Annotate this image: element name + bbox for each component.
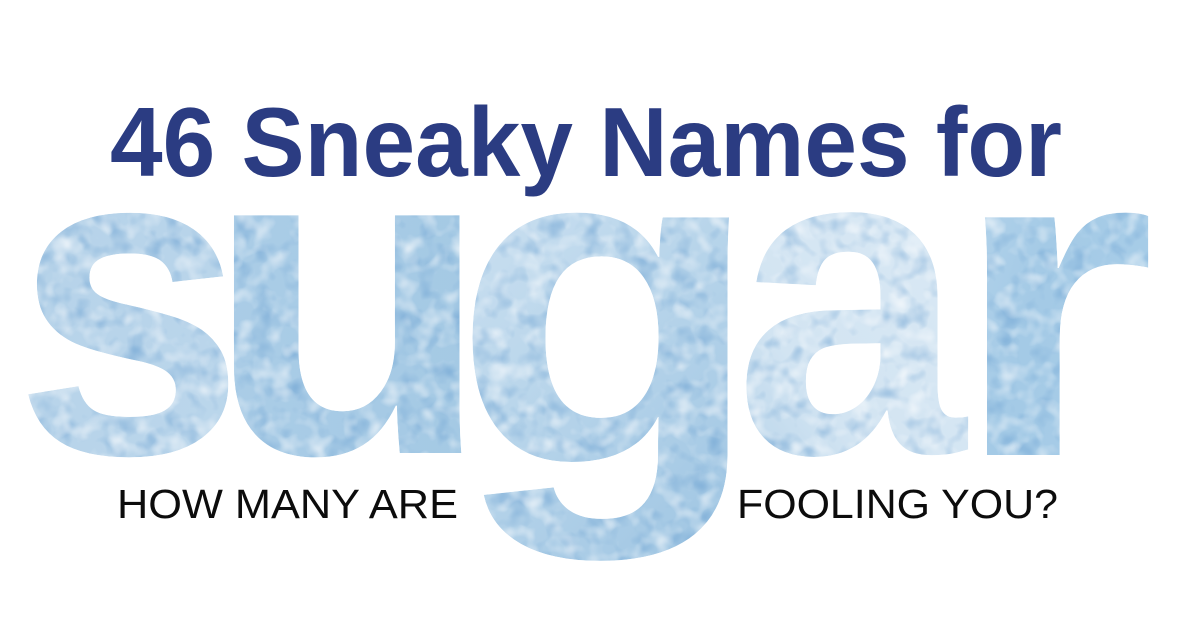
subtitle left: HOW MANY ARE	[117, 481, 458, 527]
letter a: a	[734, 49, 968, 548]
title: 46 Sneaky Names for	[110, 87, 1062, 197]
large word: sugar	[14, 44, 1156, 564]
letter g: g	[452, 44, 763, 564]
letter s: s	[14, 50, 245, 548]
letter r: r	[950, 49, 1156, 551]
letter u: u	[205, 46, 492, 549]
subtitle right: FOOLING YOU?	[737, 481, 1058, 527]
